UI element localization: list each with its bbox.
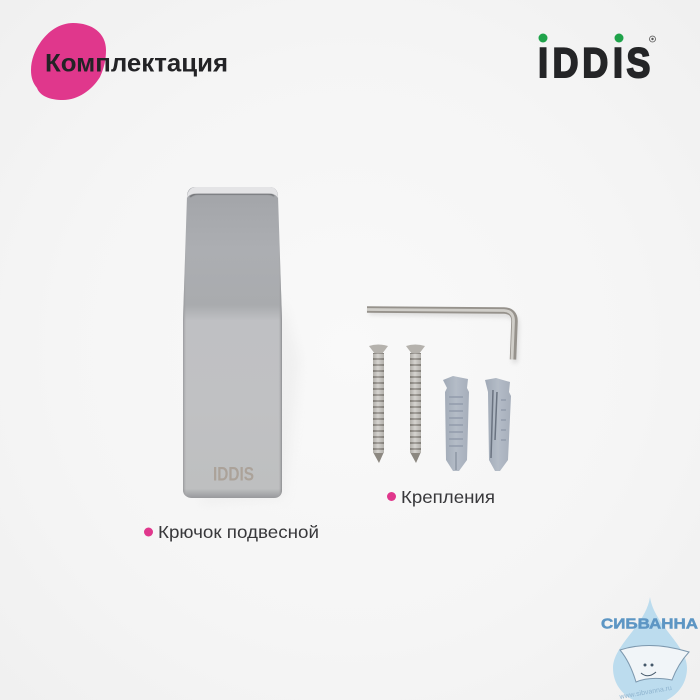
watermark: Sibvanna (601, 597, 698, 700)
wall plug 2 (485, 378, 511, 471)
hook (183, 187, 300, 503)
title: Комплектация (45, 50, 228, 78)
hex key (367, 310, 516, 363)
hook top bevel (187, 187, 278, 198)
hook engraved logo: IDDIS (213, 464, 254, 486)
screw 2 (406, 344, 425, 463)
label: hardware: Крепления (401, 487, 495, 507)
wall plug 1 (443, 376, 469, 471)
logo: IDDIS: IDDIS (538, 40, 650, 87)
watermark: Sibvanna: СИБВАННА (601, 616, 698, 632)
screw 1 (369, 344, 388, 463)
pink blob (31, 23, 106, 100)
label: hook: Крючок подвесной (158, 522, 319, 542)
